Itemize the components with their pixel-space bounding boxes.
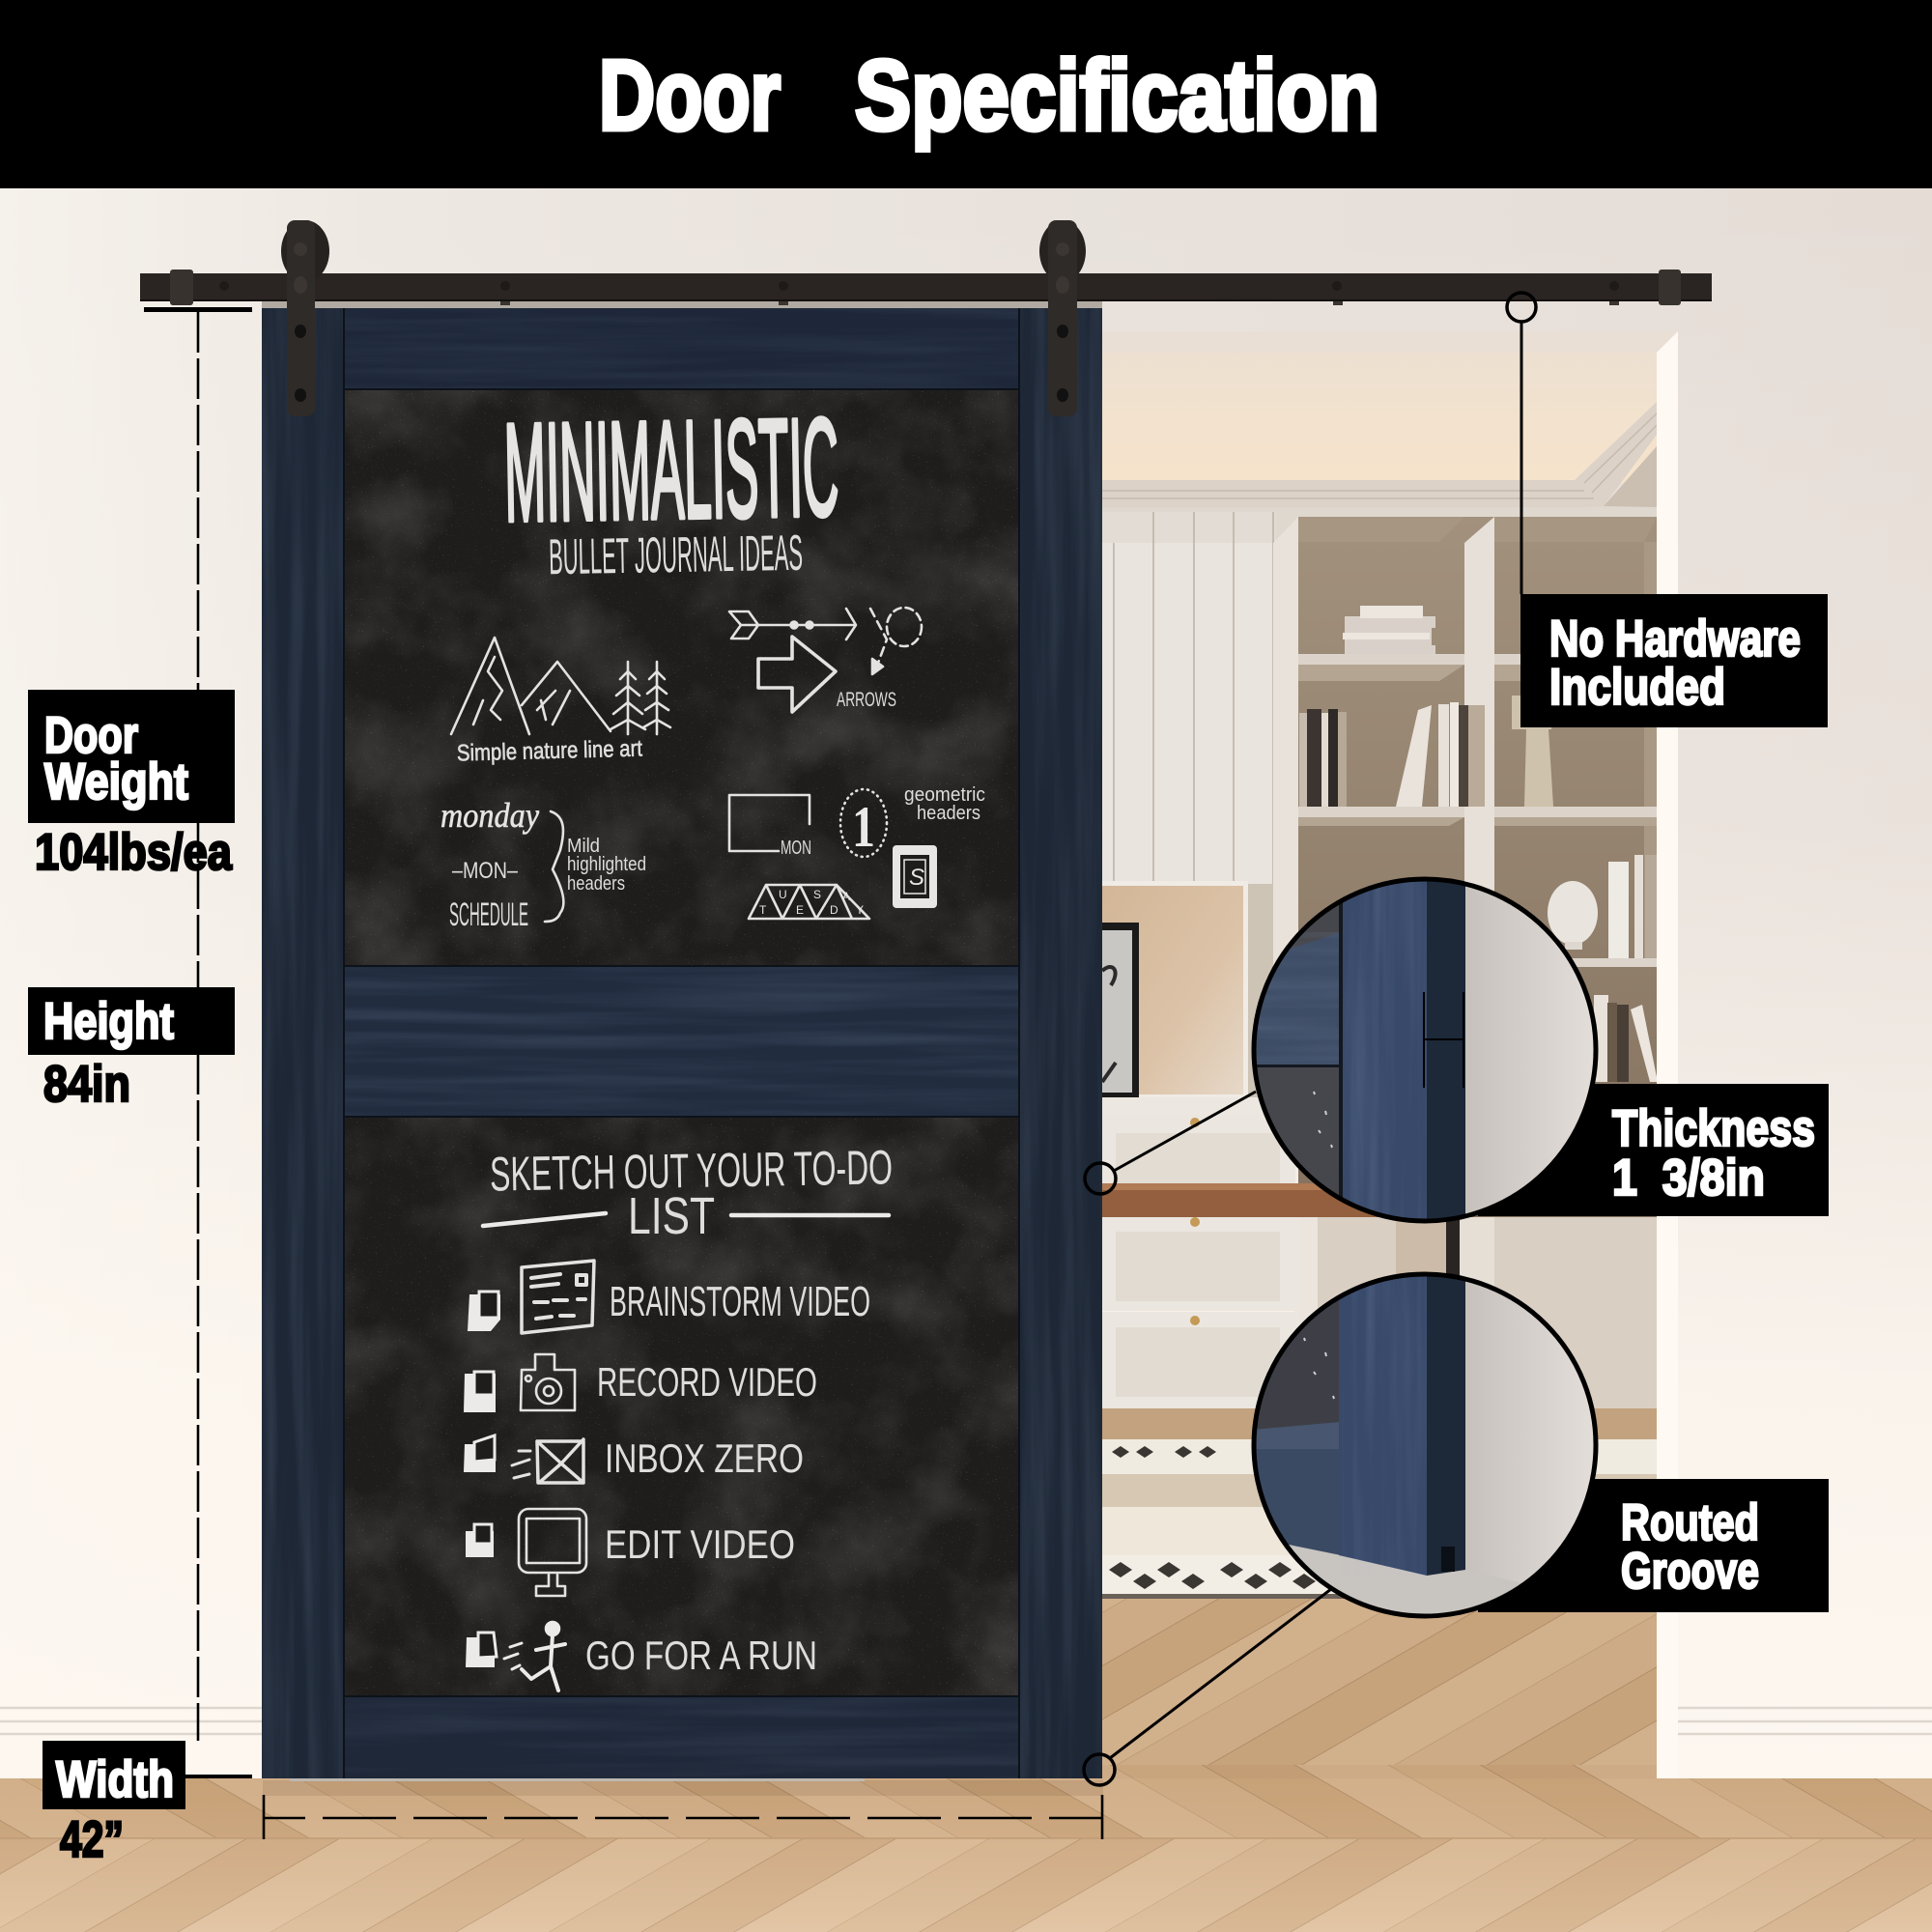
chalk note geometric: geometric: [904, 784, 985, 806]
shelf books and decor: [1345, 616, 1435, 654]
Tuesday bunting: S: [813, 888, 821, 901]
groove notch: [1441, 1547, 1455, 1572]
row: record: RECORD VIDEO: [597, 1359, 817, 1405]
floor: [0, 1778, 1932, 1932]
chalk note headers: Mild: [567, 836, 600, 857]
chalk art: upper panel: [440, 389, 985, 933]
chalk caption nature: Simple nature line art: [457, 736, 643, 767]
chalk art: upper panel: SCHEDULE: [449, 896, 528, 933]
Tuesday bunting: U: [779, 888, 787, 901]
callout text: thickness: 1 3/8in: [1612, 1150, 1765, 1207]
door jamb right: [1657, 331, 1678, 1778]
title word specification: Specification: [855, 40, 1379, 151]
row: inbox zero: INBOX ZERO: [605, 1435, 804, 1481]
Tuesday bunting: [749, 885, 869, 919]
track stop right: [1659, 270, 1681, 305]
chalk art: lower panel: [464, 1140, 893, 1690]
value: door weight: 104lbs/ea: [35, 824, 232, 881]
track stop left: [170, 270, 193, 305]
soffit: [1102, 331, 1678, 353]
left hanger: [281, 220, 329, 416]
door base: [262, 308, 1102, 1778]
row: edit video: EDIT VIDEO: [605, 1521, 795, 1567]
callout panel: routed groove: [1478, 1479, 1829, 1612]
Tuesday bunting: T: [759, 903, 767, 917]
label: height: [28, 987, 235, 1055]
label: width: Width: [56, 1751, 174, 1808]
label: height: Height: [43, 993, 174, 1050]
numbered badge: [840, 789, 887, 859]
callout text: thickness: [1612, 1100, 1815, 1207]
right hanger: [1039, 220, 1086, 416]
label: door weight: Door: [44, 707, 138, 764]
label: door weight: [28, 690, 235, 823]
icon: mountains and trees: [451, 638, 670, 734]
upper chalkboard panel: [345, 389, 1019, 966]
beadboard wall: [1102, 543, 1276, 891]
brace: [545, 811, 563, 922]
upper wall band: [1102, 502, 1657, 546]
Tuesday bunting: E: [796, 903, 804, 917]
thickness bracket: [1424, 992, 1463, 1088]
row: inbox zero: [464, 1435, 804, 1483]
right stile: [1020, 308, 1102, 1778]
icon: arrows: [729, 608, 922, 712]
width dimension line: [264, 1795, 1102, 1839]
chalk word monday: monday: [440, 796, 539, 835]
crown moulding: [1102, 402, 1657, 507]
callout text: routed groove: Groove: [1621, 1543, 1759, 1600]
Tuesday bunting: A: [842, 890, 850, 903]
value: width: 42”: [60, 1811, 124, 1868]
ceiling: [1102, 333, 1657, 483]
gap strip above door: [262, 301, 1102, 309]
room through doorway: [1102, 331, 1678, 1778]
chalk caption arrows: ARROWS: [837, 689, 896, 711]
leader: thickness: [1085, 1092, 1256, 1194]
value: height: 84in: [43, 1056, 130, 1113]
magnifier: door thickness: [1252, 869, 1601, 1227]
middle rail: [344, 966, 1019, 1117]
sliding track hardware: [140, 220, 1712, 416]
leader ring: [1507, 293, 1536, 322]
row: record: [464, 1354, 817, 1412]
chalk note headers: headers: [567, 873, 625, 895]
chalk note geometric: [904, 784, 985, 824]
chalk art: upper panel: MINIMALISTIC: [503, 389, 839, 551]
chalk note headers: [567, 836, 646, 895]
Tuesday bunting: Y: [856, 903, 864, 917]
callout text: routed groove: Routed: [1621, 1494, 1759, 1551]
bookshelf: [1273, 517, 1658, 1217]
row: go for a run: [466, 1623, 817, 1690]
S badge: S: [909, 865, 924, 891]
magnifier: routed groove: [1252, 1265, 1604, 1633]
track bolts: [219, 281, 1619, 305]
callout: no hardware included: Included: [1549, 659, 1725, 716]
row: brainstorm: [468, 1261, 870, 1333]
numbered badge: 1: [852, 795, 875, 859]
lower chalkboard panel: [345, 1117, 1019, 1696]
label: door weight: Weight: [44, 753, 188, 810]
list heading: [483, 1187, 889, 1245]
leader: routed groove: [1084, 1589, 1331, 1785]
callout text: routed groove: [1621, 1494, 1759, 1600]
doorway floor: [1102, 1599, 1657, 1778]
geometric header box: [729, 795, 811, 859]
barn door: [262, 301, 1102, 1781]
row: brainstorm: BRAINSTORM VIDEO: [610, 1278, 870, 1325]
title word door: Door: [599, 40, 781, 151]
callout: no hardware included: No Hardware: [1549, 611, 1801, 668]
chalk note headers: highlighted: [567, 854, 646, 875]
S badge: [893, 845, 937, 908]
title bar: [0, 0, 1932, 188]
cabinets and counter: [1102, 1097, 1657, 1410]
rug: [1102, 1408, 1657, 1599]
callout text: thickness: Thickness: [1612, 1100, 1815, 1157]
geometric header box: MON: [781, 838, 811, 859]
framed art: [1102, 881, 1248, 1099]
track rail: [140, 273, 1712, 301]
left stile: [262, 308, 344, 1778]
callout: no hardware included: [1507, 293, 1828, 727]
callout panel: thickness: [1478, 1084, 1829, 1216]
to-do heading: SKETCH OUT YOUR TO-DO: [490, 1140, 893, 1202]
top rail: [344, 308, 1019, 389]
chalk word mon: –MON–: [452, 858, 519, 884]
height dimension line: [144, 307, 252, 1778]
Tuesday bunting: D: [830, 903, 838, 917]
bottom rail: [344, 1696, 1019, 1778]
row: go for a run: GO FOR A RUN: [585, 1633, 817, 1678]
chalk note geometric: headers: [917, 803, 980, 824]
list heading: LIST: [628, 1187, 715, 1245]
row: edit video: [466, 1509, 795, 1596]
chalk art: upper panel: BULLET JOURNAL IDEAS: [549, 526, 803, 585]
